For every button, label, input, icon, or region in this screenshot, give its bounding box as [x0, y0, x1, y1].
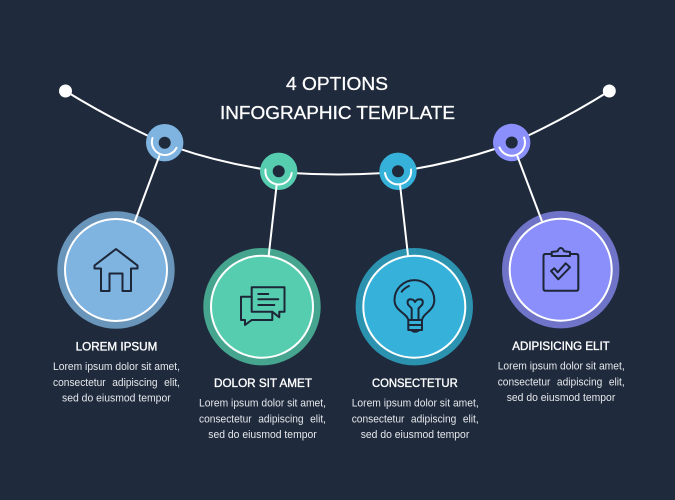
timeline node 2 — [260, 153, 297, 190]
text block: option 4: ADIPISICING ELIT — [512, 341, 610, 353]
text block: option 3: consectetur adipiscing elit, — [352, 414, 479, 426]
title — [220, 73, 455, 123]
text block: option 3 — [352, 378, 479, 441]
icon: chat bubbles — [241, 287, 284, 325]
icon: light bulb — [394, 280, 434, 332]
text block: option 2: sed do eiusmod tempor — [208, 429, 317, 441]
text block: option 4: sed do eiusmod tempor — [507, 392, 616, 404]
text block: option 1: sed do eiusmod tempor — [62, 392, 171, 404]
text block: option 3: Lorem ipsum dolor sit amet, — [352, 398, 479, 410]
panel: option 4 circle — [502, 211, 619, 328]
title: 4 OPTIONS — [286, 73, 388, 94]
panel: option 3 circle — [356, 248, 473, 365]
timeline node 1 — [146, 124, 183, 161]
panel: option 1 circle — [57, 211, 175, 329]
text block: option 3: sed do eiusmod tempor — [361, 429, 470, 441]
text block: option 1 — [53, 342, 180, 404]
icon: clipboard with check — [544, 248, 578, 291]
text block: option 2: Lorem ipsum dolor sit amet, — [199, 398, 326, 410]
icon: house — [94, 249, 138, 291]
connector lines — [135, 156, 542, 256]
text block: option 2 — [199, 378, 326, 441]
curved timeline — [59, 84, 616, 174]
title: INFOGRAPHIC TEMPLATE — [220, 102, 455, 123]
text block: option 1: Lorem ipsum dolor sit amet, — [53, 361, 180, 373]
text block: option 4: consectetur adipiscing elit, — [498, 376, 625, 388]
timeline node 3 — [379, 153, 417, 190]
text block: option 1: LOREM IPSUM — [76, 342, 157, 354]
text block: option 4: Lorem ipsum dolor sit amet, — [498, 360, 625, 372]
timeline node 4 — [493, 124, 530, 161]
text block: option 2: consectetur adipiscing elit, — [199, 414, 326, 426]
text block: option 3: CONSECTETUR — [372, 378, 458, 390]
text block: option 1: consectetur adipiscing elit, — [53, 377, 180, 389]
text block: option 2: DOLOR SIT AMET — [214, 378, 312, 390]
text block: option 4 — [498, 341, 625, 404]
panel: option 2 circle — [203, 248, 321, 365]
